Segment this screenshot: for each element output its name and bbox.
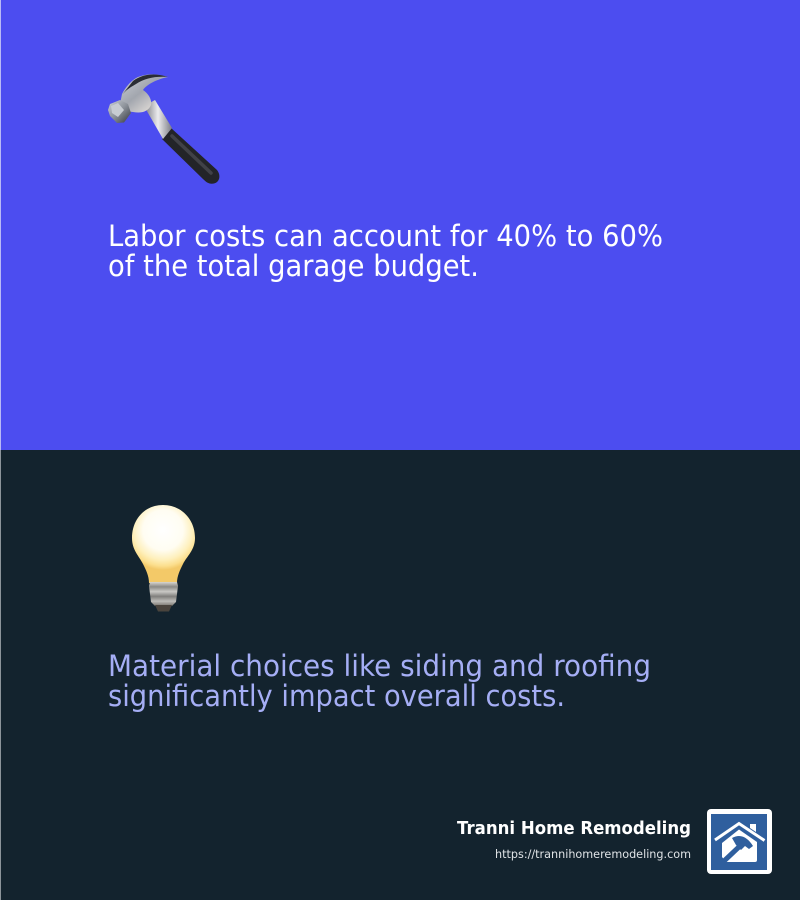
text: labor statement: Labor costs can account for 40% to 60%	[108, 219, 663, 253]
panel: labor costs	[0, 0, 800, 450]
footer brand	[457, 809, 772, 874]
text: labor statement: of the total garage budget.	[108, 249, 479, 283]
logo	[707, 809, 772, 874]
panel: material choices	[0, 450, 800, 900]
icon: light bulb	[132, 505, 195, 612]
text: labor statement	[108, 219, 663, 283]
text: material statement	[108, 649, 651, 713]
brand name: Tranni Home Remodeling	[457, 818, 691, 839]
text: material statement: significantly impact overall costs.	[108, 679, 565, 713]
icon: hammer	[108, 74, 219, 184]
decorative left edge	[0, 0, 1, 450]
website url: https://trannihomeremodeling.com	[495, 847, 691, 861]
text: material statement: Material choices like siding and roofing	[108, 649, 651, 683]
